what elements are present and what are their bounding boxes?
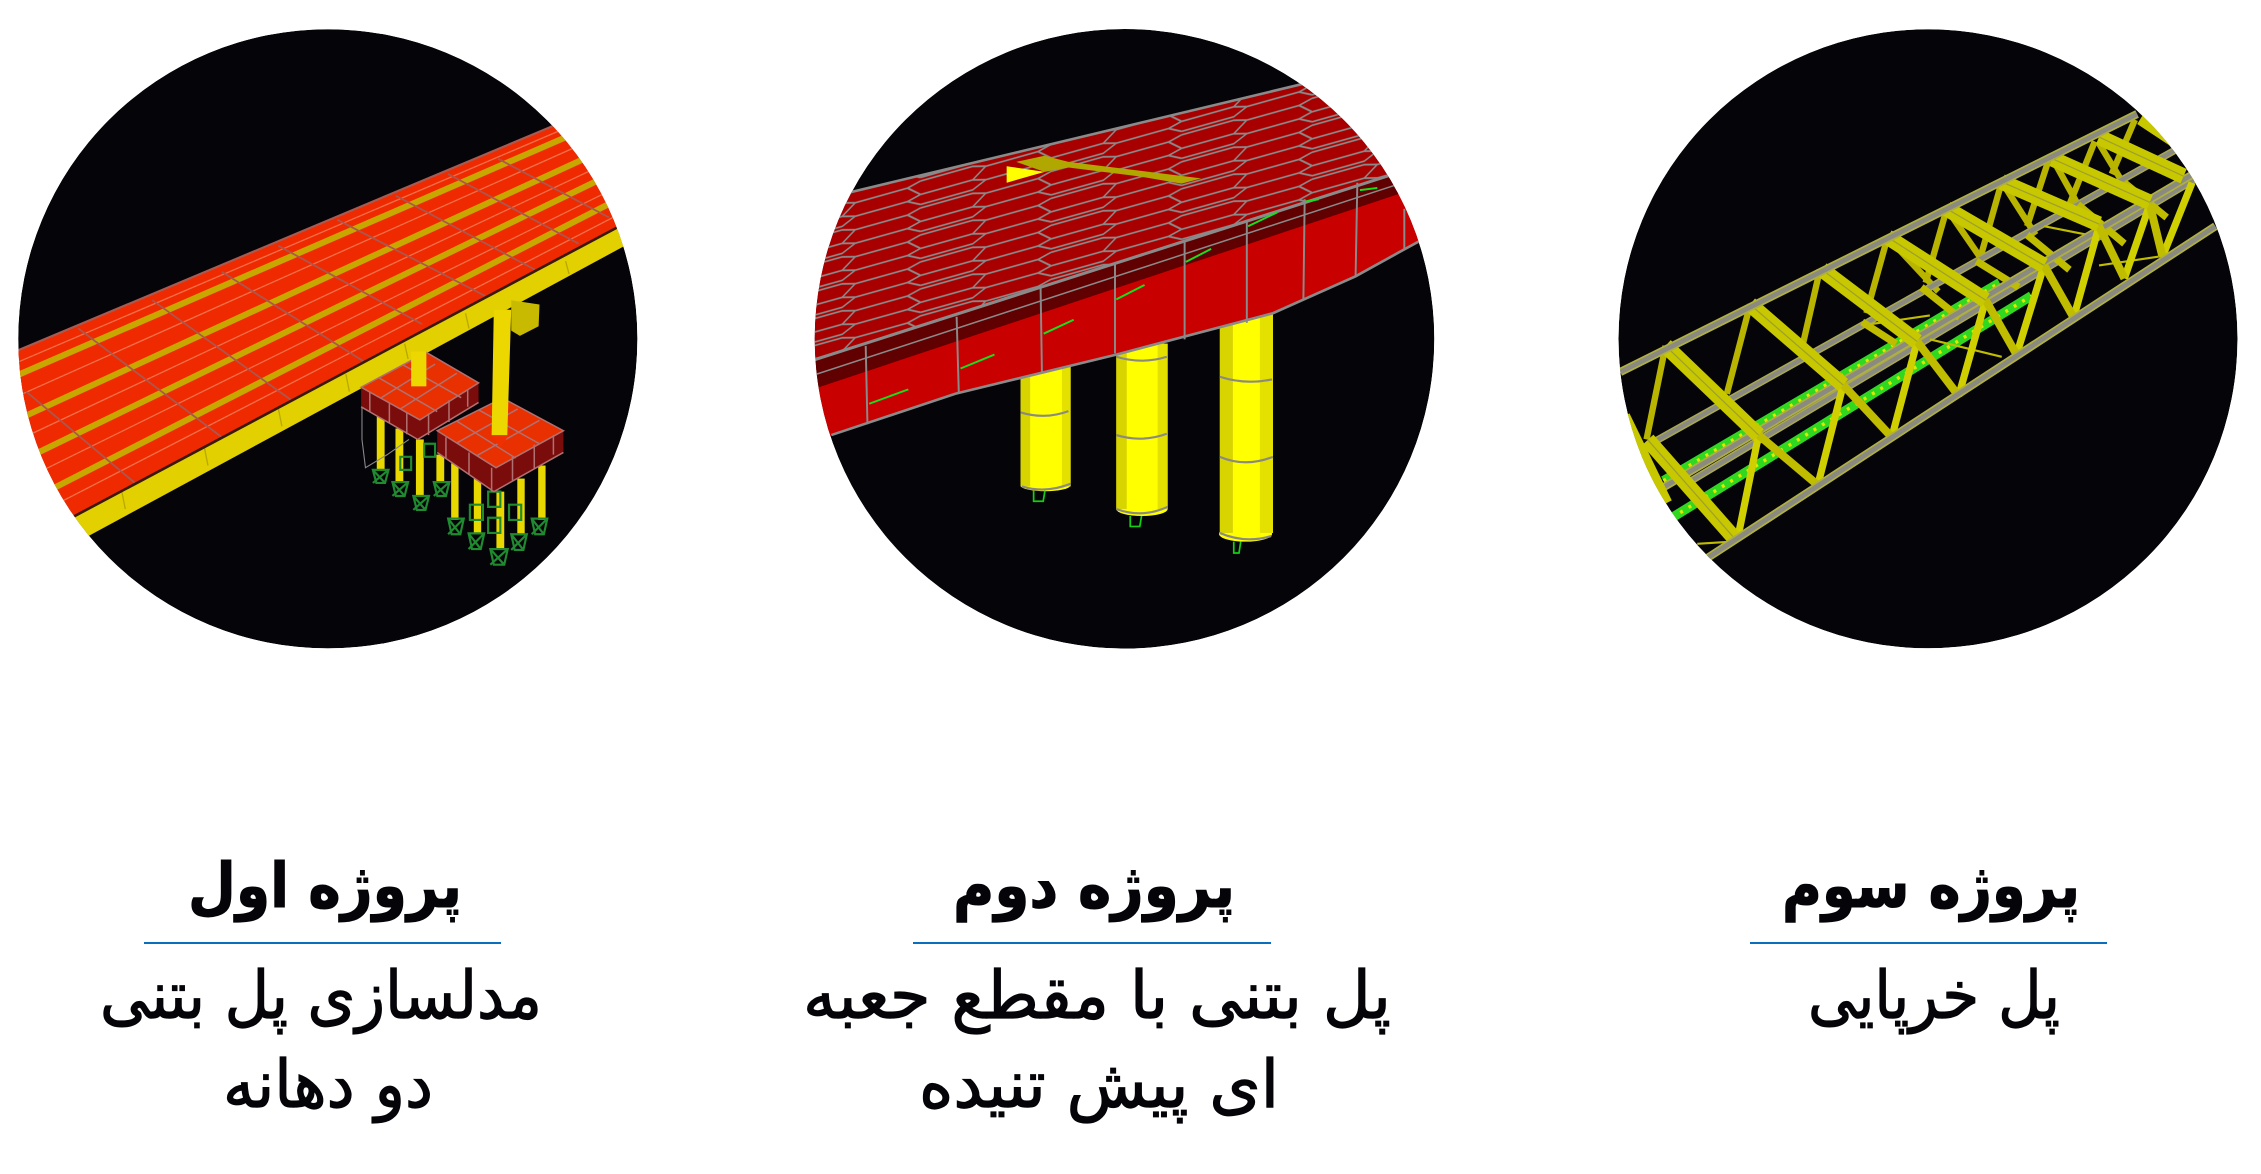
yellow marker on deck [1016, 156, 1201, 184]
thick top cross beams [1621, 117, 2201, 537]
lower cross beams [1862, 183, 2167, 344]
image: truss bridge model [1618, 29, 2238, 648]
cylindrical piers [1021, 309, 1273, 553]
image: box girder prestressed concrete bridge model [814, 29, 1434, 649]
heading: project one: پروژه اول [188, 849, 462, 922]
piles behind caps [377, 413, 546, 548]
near lower chord [1706, 226, 2215, 559]
deck edge strip [816, 176, 1398, 388]
description: project two: ای پیش تنیده [919, 1046, 1279, 1123]
pier columns [411, 352, 426, 386]
image: concrete two span bridge model [18, 29, 638, 648]
panel: project three [1618, 29, 2238, 1034]
girder face [818, 194, 1419, 436]
near top chord [1663, 170, 2201, 487]
heading: project three: پروژه سوم [1782, 849, 2080, 923]
pile cap 2 [437, 431, 563, 492]
far diagonals [1647, 120, 2135, 439]
description: project three: پل خرپایی [1808, 957, 2060, 1034]
pile cap 1 [361, 383, 479, 439]
panel: project one [18, 29, 638, 1124]
heading: project two: پروژه دوم [953, 849, 1235, 923]
far lower chord [1651, 150, 2196, 487]
description: project two: پل بتنی با مقطع جعبه [803, 957, 1391, 1034]
panel: project two [790, 29, 1486, 1123]
green stringers [1663, 283, 2031, 518]
description: project one: مدلسازی پل بتنی [100, 957, 542, 1034]
description: project two [803, 957, 1391, 1123]
near diagonals [1737, 183, 2192, 539]
far top chord [1620, 114, 2137, 372]
description: project one [100, 957, 542, 1123]
description: project one: دو دهانه [223, 1046, 433, 1123]
